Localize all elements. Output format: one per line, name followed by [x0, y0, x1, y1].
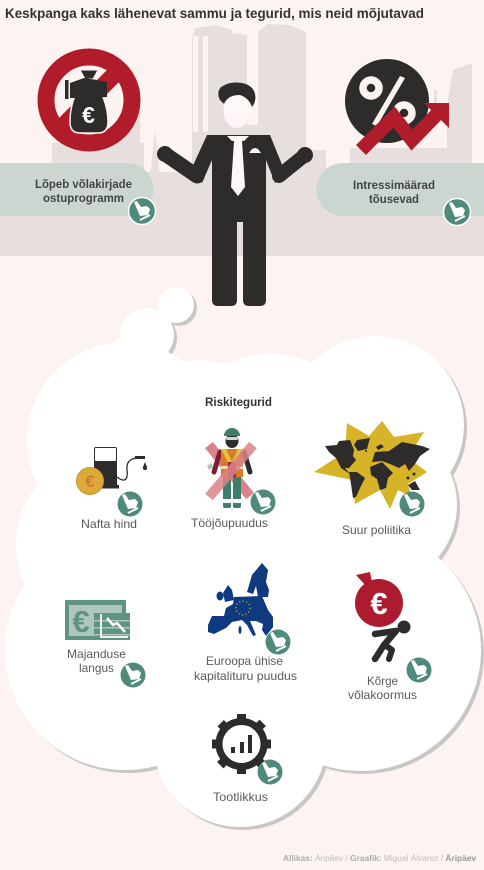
label: high debt burden: võlakoormus — [348, 688, 417, 702]
panel: right step pill — [316, 163, 484, 216]
footer: source credits: Allikas: Äripäev / Graafik: Miguel Álvarez / Äripäev — [283, 854, 477, 863]
icon: gear with bars — [212, 714, 271, 774]
icon: percent with rising arrow — [345, 59, 449, 150]
icon: map of EU — [208, 563, 273, 636]
icon: pointer button, big politics — [400, 492, 424, 516]
label: high debt burden: Kõrge — [367, 674, 398, 688]
label: oil price: Nafta hind — [81, 517, 137, 531]
icon: banknote and falling chart — [65, 600, 130, 640]
label: high debt burden — [348, 674, 417, 702]
city skyline background — [0, 24, 484, 256]
label: productivity: Tootlikkus — [213, 790, 268, 804]
icon: pointer button, labour shortage — [250, 490, 276, 514]
panel: left step pill: ostuprogramm — [43, 193, 124, 205]
icon: banknote and falling chart: € — [72, 604, 90, 639]
icon: pointer button, productivity — [258, 760, 282, 784]
icon: fuel pump with coin: € — [85, 472, 95, 491]
icon: world map on explosion — [314, 421, 430, 509]
label: economic decline: langus — [79, 661, 114, 675]
cloud: thought bubble with risk factors — [5, 287, 484, 830]
icon: fuel pump with coin — [76, 447, 147, 494]
heading: risk factors: Riskitegurid — [205, 395, 272, 409]
icon: pointer button, economic decline — [120, 662, 146, 688]
title: Keskpanga kaks lähenevat sammu ja tegurid, mis neid mõjutavad — [5, 5, 424, 21]
label: lack of European capital market: kapitalituru puudus — [194, 669, 297, 683]
label: economic decline — [67, 647, 126, 675]
icon: pointer button, oil price — [118, 492, 142, 516]
icon: pointer button, capital market — [266, 630, 290, 654]
label: lack of European capital market — [194, 654, 297, 683]
label: labour shortage: Tööjõupuudus — [191, 516, 268, 530]
label: big politics: Suur poliitika — [342, 523, 411, 537]
icon: crossed-out money bag: € — [82, 102, 95, 128]
panel: right step pill: tõusevad — [369, 194, 419, 206]
icon: person carrying debt bag — [355, 572, 410, 659]
figure: businessman shrugging — [157, 82, 313, 306]
label: lack of European capital market: Euroopa ühise — [206, 654, 283, 668]
icon: pointer button, left pill — [128, 198, 156, 224]
icon: crossed-out money bag — [46, 57, 132, 143]
icon: pointer button, debt burden — [406, 658, 432, 682]
icon: pointer button, right pill — [444, 198, 470, 226]
label: economic decline: Majanduse — [67, 647, 126, 661]
panel: right step pill: Intressimäärad — [353, 180, 435, 192]
panel: left step pill — [0, 163, 154, 216]
icon: person carrying debt bag: € — [370, 586, 388, 621]
icon: worker crossed out — [207, 428, 253, 508]
panel: left step pill: Lõpeb võlakirjade — [35, 179, 132, 191]
